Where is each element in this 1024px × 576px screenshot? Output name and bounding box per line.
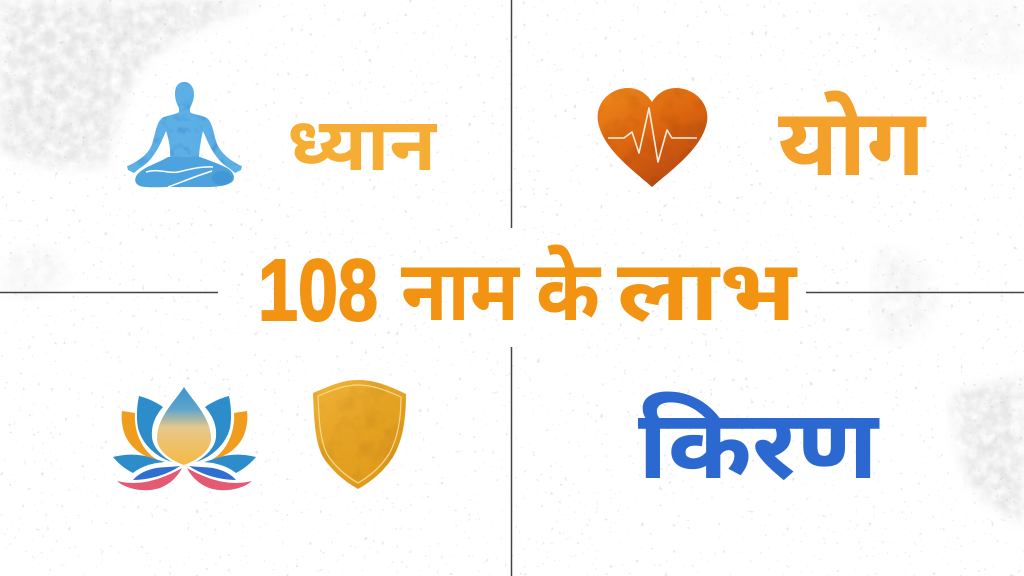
title word: naam: नाम	[401, 244, 520, 338]
title word: laabh: लाभ	[617, 244, 798, 338]
title word: ke: के	[536, 244, 601, 338]
label: dhyan: ध्यान	[287, 103, 438, 186]
title number: 108	[258, 242, 378, 339]
icon: meditating figure	[125, 80, 245, 187]
label: yog: योग	[778, 90, 927, 195]
title	[258, 242, 798, 339]
label: kiran: किरण	[638, 392, 880, 499]
icon: lotus	[113, 387, 256, 490]
icon: golden shield	[313, 380, 406, 489]
icon: heart with pulse	[595, 85, 710, 190]
